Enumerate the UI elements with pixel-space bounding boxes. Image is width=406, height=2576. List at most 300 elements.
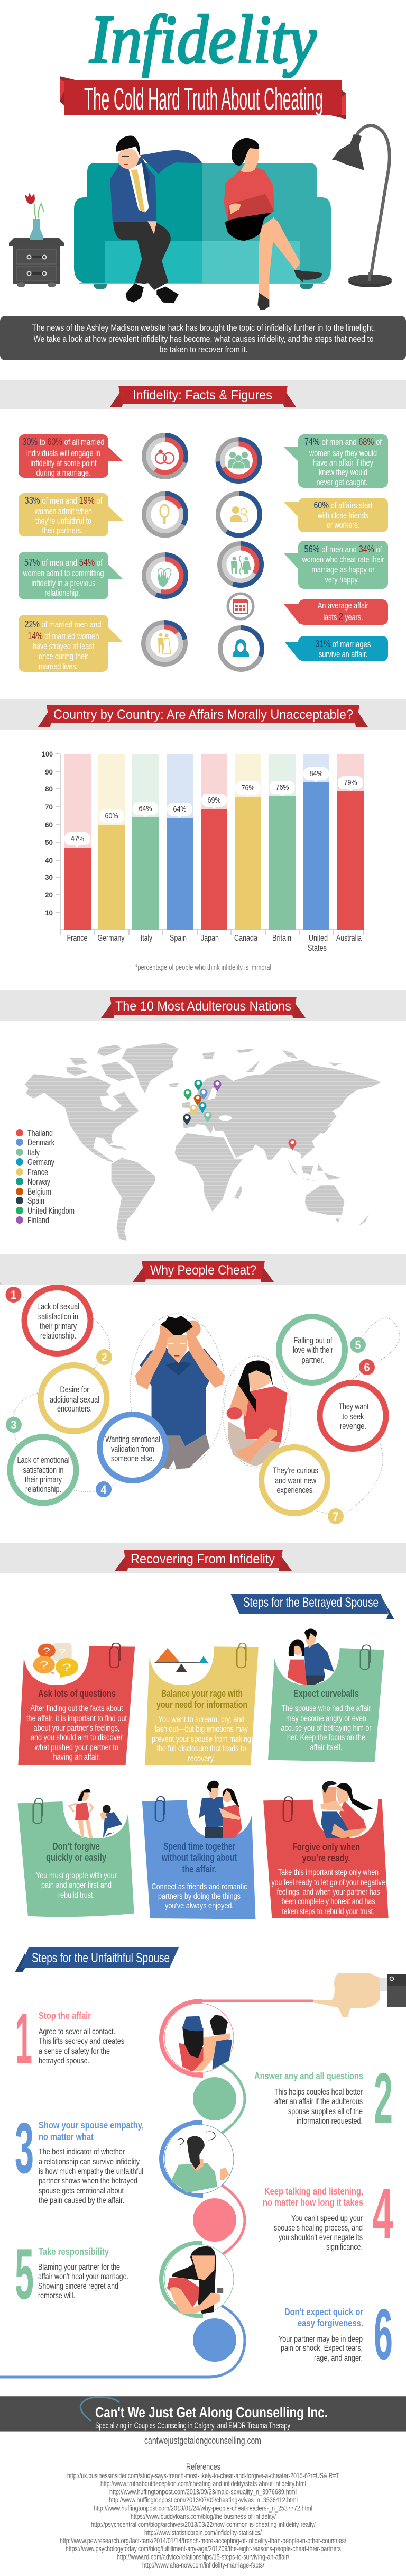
reason 2: additional sexual — [50, 1395, 99, 1405]
card: expect curveballs: her. Keep the focus on the — [287, 1733, 365, 1742]
map pin: United Kingdom — [184, 1089, 191, 1100]
sofa — [74, 163, 331, 289]
step 6: pain or shock. Expect tears, — [281, 2344, 363, 2353]
card: don't forgive quickly: rebuild trust. — [58, 1891, 95, 1900]
step 4: significance. — [326, 2243, 363, 2252]
card: spend time together: Spend time together — [163, 1841, 235, 1852]
card: balance your rage: recovery. — [188, 1754, 215, 1763]
step 4 — [263, 2173, 393, 2254]
callout: 74 and 68 percent: women say they would — [309, 449, 377, 458]
map pin: Finland — [214, 1080, 221, 1091]
chart axes: 30 — [45, 873, 53, 881]
icon: question bubbles — [33, 1643, 78, 1678]
map legend — [16, 1128, 75, 1225]
card: spend time together: without talking about — [161, 1852, 237, 1863]
step 5: Take responsibility — [39, 2246, 109, 2257]
card: spend time together — [142, 1781, 255, 1919]
reason 1: 1 — [11, 1288, 16, 1301]
photo circle: woman with phone — [164, 2244, 234, 2314]
reason 5 — [279, 1316, 366, 1383]
step 1: betrayed spouse. — [39, 2056, 89, 2065]
callout: 22 and 14 percent: married lives. — [39, 662, 78, 671]
footer band with logo — [0, 2396, 406, 2432]
map pin: Thailand — [289, 1139, 296, 1150]
step 3: no matter what — [39, 2131, 94, 2142]
step 2: information requested. — [297, 2117, 363, 2126]
icon: paperclip — [155, 1797, 164, 1821]
bar: Australia 79 percent — [336, 754, 364, 943]
bar: Canada 76 percent: Canada — [234, 934, 257, 943]
card: ask lots of questions: Ask lots of questions — [38, 1688, 116, 1699]
heading: facts and figures: Infidelity: Facts & Figures — [133, 388, 272, 403]
references: http://www.rd.com/advice/relationships/15-steps-to-surviving-an-affair/ — [117, 2553, 289, 2561]
callout: 57 and 54 percent: 57% of men and 54% of — [24, 557, 103, 568]
card: ask lots of questions: what pushed your partner to — [34, 1743, 118, 1752]
icon: paperclip — [361, 1645, 370, 1670]
card: don't forgive quickly: You must grapple with your — [36, 1871, 117, 1880]
card: balance your rage: your need for information — [156, 1699, 247, 1710]
callout: 57 and 54 percent: relationship. — [44, 588, 80, 598]
step 2: after an affair if the adulterous — [274, 2097, 363, 2106]
card: forgive only when ready: Forgive only when — [292, 1842, 360, 1852]
reason 6: revenge. — [340, 1422, 366, 1431]
chart axes: 50 — [45, 839, 53, 846]
callout: 56 and 34 percent: marriage as happy or — [312, 565, 375, 575]
reason 3: their primary — [25, 1475, 62, 1485]
chart axes: 60 — [45, 821, 53, 829]
card: forgive only when ready: taken steps to rebuild your trust. — [282, 1907, 374, 1916]
card: spend time together: you've always enjoyed. — [165, 1901, 234, 1910]
illustration: worried man — [135, 1316, 225, 1469]
callout: 74 and 68 percent: 74% of men and 68% of — [304, 436, 382, 447]
bar: Canada 76 percent: 76% — [241, 784, 255, 793]
reason 1: satisfaction in — [38, 1312, 78, 1322]
bar chart: moral unacceptability by country — [42, 750, 364, 953]
icon: paperclip — [33, 1798, 43, 1824]
bar: Italy 64 percent: 64% — [139, 804, 152, 813]
bar: Japan 69 percent: Japan — [201, 934, 219, 943]
bar: France 47 percent: 47% — [71, 834, 84, 843]
banner: steps for the unfaithful spouse: Steps for the Unfaithful Spouse — [32, 1951, 170, 1965]
step 5 — [15, 2234, 128, 2314]
references: http://www.huffingtonpost.com/2013/07/02/cheating-wives_n_3536412.html — [109, 2496, 298, 2504]
chart axes: 80 — [45, 785, 53, 793]
callout: 30 to 60 percent: during a marriage. — [36, 468, 91, 478]
icon: pointing hand — [313, 1973, 406, 2017]
chart axes: 90 — [45, 768, 53, 776]
map pin: Germany — [199, 1102, 206, 1113]
reason 1: Lack of sexual — [37, 1302, 79, 1312]
card: don't forgive quickly: pain and anger first and — [41, 1881, 112, 1890]
reason 1 — [5, 1287, 90, 1353]
reason 7: and want new — [275, 1476, 316, 1486]
reason 3 — [6, 1417, 76, 1503]
step 2: Answer any and all questions — [254, 2070, 363, 2081]
photo circle: woman from behind — [164, 2125, 234, 2193]
heading: recovering from infidelity — [0, 1543, 406, 1573]
step 3 — [15, 2108, 144, 2205]
reason 5: 5 — [355, 1339, 361, 1352]
banner: steps for the unfaithful spouse — [15, 1947, 179, 1972]
card: spend time together: partners by doing the things — [158, 1892, 241, 1901]
references: http://www.truthaboutdeception.com/cheating-and-infidelity/stats-about-infidelity.html — [100, 2480, 306, 2488]
card: balance your rage: prevent your spouse from making — [152, 1735, 251, 1744]
step 6: Don’t expect quick or — [284, 2306, 363, 2317]
photo circle: couple from behind — [164, 2003, 234, 2073]
callout: 33 and 19 percent — [19, 493, 123, 536]
heading: most adulterous nations — [0, 990, 406, 1021]
card: forgive only when ready: been completely honest and has — [281, 1897, 375, 1906]
world map — [25, 1043, 381, 1241]
reason 3: satisfaction in — [23, 1466, 63, 1475]
bar: Spain 64 percent — [167, 754, 193, 943]
bar: United States 84 percent: 84% — [310, 769, 322, 778]
bar: Germany 60 percent: 60% — [105, 812, 118, 821]
card: ask lots of questions: about your partner's feelings, — [34, 1724, 119, 1733]
map legend: United Kingdom — [27, 1206, 75, 1216]
bar: Italy 64 percent: Italy — [141, 934, 152, 943]
step 1: This lifts secrecy and creates — [39, 2037, 124, 2046]
step 1: a sense of safety for the — [39, 2047, 110, 2056]
step 4: you shouldn't ever negate its — [279, 2233, 363, 2242]
callout: 22 and 14 percent: 22% of married men and — [24, 619, 102, 630]
card: expect curveballs: accuse you of betraying him or — [281, 1724, 371, 1733]
step 3: Show your spouse empathy, — [39, 2119, 144, 2131]
card: forgive only when ready — [263, 1781, 389, 1918]
card: ask lots of questions: After finding out the facts about — [31, 1704, 123, 1713]
chart axes: 40 — [45, 857, 53, 864]
heading: recovering from infidelity: Recovering From Infidelity — [131, 1552, 275, 1567]
heading: why people cheat: Why People Cheat? — [150, 1263, 256, 1278]
callout: 33 and 19 percent: their partners. — [42, 526, 82, 535]
bar: Britain 76 percent: Britain — [272, 934, 291, 943]
chart footnote: *percentage of people who think infidelity is immoral — [135, 963, 271, 972]
step 3: spouse gets emotional about — [39, 2187, 124, 2196]
bar: Australia 79 percent: Australia — [336, 934, 362, 943]
references: http://psychcentral.com/blog/archives/2013/03/22/how-common-is-cheating-infidelity-really/ — [91, 2520, 316, 2528]
card: balance your rage — [145, 1643, 259, 1765]
step 6 — [279, 2294, 393, 2374]
callout: 60 percent: 60% of affairs start — [314, 500, 373, 511]
reason 1: their primary — [40, 1322, 77, 1331]
reason 3: Lack of emotional — [17, 1455, 70, 1465]
map pin: Spain — [183, 1114, 191, 1125]
icon: question bubbles: ? — [43, 1646, 50, 1656]
intro text box — [0, 316, 406, 360]
card: expect curveballs — [268, 1629, 384, 1762]
step 5: affair won't heal your marriage. — [38, 2272, 128, 2281]
logo arc — [80, 2397, 119, 2421]
step 2: This helps couples heal better — [274, 2088, 363, 2097]
step 3: partner shows when the betrayed — [39, 2177, 137, 2186]
map pin: Norway — [195, 1080, 202, 1091]
icon: paperclip — [237, 1643, 246, 1668]
card: balance your rage: the full disclosure that leads to — [156, 1744, 246, 1753]
reason 6: to seek — [343, 1412, 364, 1422]
chart axes: 20 — [45, 891, 53, 899]
reason 3: relationship. — [25, 1485, 61, 1494]
reason 7: 7 — [333, 1510, 338, 1523]
map legend: Germany — [27, 1158, 55, 1167]
step 3: The best indicator of whether — [39, 2147, 125, 2156]
callout: 33 and 19 percent: women admit when — [34, 507, 92, 516]
icon: question bubbles: ? — [62, 1661, 71, 1673]
callout: 74 and 68 percent: never get caught. — [316, 478, 368, 487]
bar: Japan 69 percent: 69% — [207, 796, 221, 805]
reason 4: validation from — [111, 1444, 154, 1454]
chart axes: 70 — [45, 803, 53, 811]
heading: country by country: Country by Country: Are Affairs Morally Unacceptable? — [53, 707, 353, 722]
step 3: is how much empathy the unfaithful — [39, 2167, 143, 2176]
callout: 56 and 34 percent: very happy. — [325, 575, 359, 585]
map legend: Denmark — [27, 1138, 55, 1148]
bar: Japan 69 percent — [201, 754, 227, 943]
callout: average affair: lasts 2 years. — [324, 612, 363, 623]
step 6: rage, and anger. — [314, 2354, 363, 2363]
donut: 74 and 68 percent with group icon — [218, 439, 260, 481]
map pin: Denmark — [200, 1089, 207, 1100]
card: spend time together: the affair. — [182, 1864, 217, 1874]
bar: Britain 76 percent: 76% — [276, 783, 289, 792]
map legend: Finland — [27, 1216, 49, 1225]
card: ask lots of questions: having an affair. — [53, 1753, 100, 1762]
chart axes: 10 — [45, 909, 53, 917]
bar: Canada 76 percent — [234, 754, 261, 943]
card: spend time together: Connect as friends and romantic — [151, 1882, 247, 1891]
icon: question bubbles: ? — [59, 1647, 66, 1657]
bar: Spain 64 percent: 64% — [173, 805, 186, 814]
step 4: You can't speed up your — [291, 2214, 363, 2223]
reason 4 — [96, 1415, 166, 1497]
floor lamp — [332, 125, 392, 287]
illustration: couple together — [199, 1781, 242, 1838]
card: don't forgive quickly: Don’t forgive — [52, 1841, 100, 1852]
callout: 60 percent: with close friends — [317, 511, 368, 521]
donut: 33 and 19 percent with mirror icon — [144, 494, 186, 535]
icon: paperclip — [283, 1797, 292, 1821]
bar: Australia 79 percent: 79% — [344, 778, 357, 787]
callout: average affair: An average affair — [318, 601, 368, 611]
bar: Germany 60 percent — [97, 754, 125, 943]
bar: France 47 percent: France — [67, 934, 88, 943]
step 2 — [254, 2058, 393, 2138]
step 5: remorse will. — [38, 2291, 75, 2300]
bar: France 47 percent — [64, 754, 91, 943]
callout: 56 and 34 percent: 56% of men and 34% of — [304, 544, 382, 554]
card: expect curveballs: The spouse who had the affair — [281, 1704, 371, 1713]
card: expect curveballs: Expect curveballs — [293, 1688, 359, 1699]
subtitle ribbon — [60, 76, 346, 119]
callout: 57 and 54 percent: infidelity in a previous — [32, 579, 95, 588]
card: ask lots of questions — [18, 1643, 135, 1765]
card: expect curveballs: affair itself. — [310, 1743, 343, 1752]
small ring: calendar icon — [228, 594, 253, 619]
illustration: arguing couple — [69, 1789, 122, 1838]
bar: United States 84 percent: United — [309, 934, 328, 943]
map legend: Thailand — [27, 1128, 53, 1138]
reason 1: relationship. — [40, 1331, 76, 1341]
chart axes: 100 — [42, 750, 53, 758]
card: balance your rage: You want to scream, cry, and — [159, 1715, 244, 1724]
icon: balance scale — [154, 1648, 208, 1672]
card: expect curveballs: may become angry or even — [286, 1714, 366, 1723]
callout: 33 and 19 percent: 33% of men and 19% of — [24, 495, 103, 506]
bar: United States 84 percent: States — [308, 944, 327, 953]
callout: 74 and 68 percent: have an affair if they — [313, 458, 374, 468]
callout: 30 to 60 percent: 30% to 60% of all married — [22, 436, 105, 447]
reason 2: 2 — [102, 1351, 107, 1364]
map pin: France — [189, 1105, 198, 1116]
step 2: spouse supplies all of the — [288, 2107, 363, 2116]
step 5: Showing sincere regret and — [38, 2282, 118, 2291]
disc: green — [193, 2077, 236, 2120]
callout: 57 and 54 percent — [19, 552, 123, 599]
bar: Spain 64 percent: Spain — [170, 934, 187, 943]
reason 6: 6 — [364, 1361, 370, 1374]
illustration: couple — [288, 1629, 334, 1685]
reason 3: 3 — [11, 1418, 17, 1432]
callout: 22 and 14 percent: have strayed at least — [33, 642, 94, 651]
disc: blue — [193, 2318, 236, 2362]
donut: 31 percent with woman icon — [220, 627, 262, 670]
heading: most adulterous nations: The 10 Most Adulterous Nations — [115, 999, 291, 1014]
bar: United States 84 percent — [303, 754, 329, 953]
footer band with logo: Specializing in Couples Counseling in Calgary, and EMDR Trauma Therapy — [95, 2421, 290, 2431]
heading: facts and figures — [0, 380, 406, 409]
step 6: easy forgiveness. — [298, 2317, 363, 2328]
references: http://www.huffingtonpost.com/2013/09/23/male-sexuality_n_3976689.html — [109, 2488, 297, 2496]
banner: steps for the betrayed spouse — [230, 1594, 394, 1619]
references: https://www.buddyloans.com/blog/the-business-of-infidelity/ — [131, 2513, 276, 2520]
map pin: Italy — [204, 1112, 211, 1123]
callout: 22 and 14 percent: once during their — [39, 652, 88, 661]
chart axes — [42, 750, 364, 935]
callout: average affair — [284, 599, 388, 625]
reason 7: experiences. — [277, 1486, 314, 1495]
callout: 56 and 34 percent — [284, 541, 388, 589]
map legend: Spain — [27, 1196, 44, 1206]
step 1: 1 — [15, 1998, 32, 2079]
donut: 60 percent with two people icon — [218, 494, 260, 535]
donut: 56 and 34 percent with split couple icon — [220, 544, 261, 585]
card: ask lots of questions: the affair, it is important to find out — [26, 1714, 127, 1723]
references — [60, 2462, 346, 2569]
callout: 31 percent: 31% of marriages — [315, 639, 371, 649]
callout: 31 percent — [284, 636, 388, 661]
callout: 30 to 60 percent: infidelity at some point — [31, 459, 97, 468]
donut: 22 and 14 percent with wedding couple icon — [144, 622, 185, 665]
bar: Britain 76 percent — [269, 754, 296, 943]
card: don't forgive quickly: quickly or easily — [46, 1852, 106, 1863]
reason 6 — [320, 1359, 386, 1449]
footer band with logo: Can't We Just Get Along Counselling Inc. — [95, 2404, 328, 2420]
map legend: France — [27, 1168, 48, 1177]
callout: 22 and 14 percent: 14% of married women — [27, 631, 99, 641]
heading: why people cheat — [0, 1254, 406, 1285]
illustration: worried woman — [227, 1360, 288, 1467]
map legend: Norway — [27, 1177, 51, 1187]
step 6: Your partner may be in deep — [279, 2335, 363, 2344]
references: References — [186, 2462, 220, 2472]
website: cantwejustgetalongcounselling.com — [144, 2435, 261, 2446]
step 1 — [15, 1998, 124, 2079]
reason 4: 4 — [100, 1483, 107, 1496]
step 5: 5 — [15, 2234, 34, 2314]
donut: 30 and 60 percent with rings icon — [144, 435, 186, 477]
step 4: no matter how long it takes — [263, 2197, 363, 2208]
card: ask lots of questions: and you should aim to discover — [31, 1733, 123, 1742]
step 5: Blaming your partner for the — [38, 2263, 120, 2272]
reason 2: encounters. — [57, 1404, 92, 1414]
reason 2 — [41, 1349, 112, 1432]
map pin: Belgium — [193, 1095, 202, 1106]
step 3: the pain caused by the affair. — [39, 2196, 124, 2205]
step 3: a relationship can survive infidelity — [39, 2158, 140, 2167]
callout: 74 and 68 percent: knew they would — [319, 468, 367, 477]
icon: question bubbles: ? — [40, 1659, 49, 1671]
card: forgive only when ready: Take this important step only when — [278, 1868, 379, 1877]
heading: country by country — [0, 699, 406, 730]
title: Infidelity — [89, 2, 317, 78]
step 4: spouse's healing process, and — [274, 2224, 363, 2233]
reason 5: love with their — [293, 1345, 333, 1355]
timeline connector — [0, 2001, 313, 2377]
card: don't forgive quickly — [17, 1789, 134, 1917]
bar: Italy 64 percent — [132, 754, 159, 943]
callout: 22 and 14 percent — [19, 615, 123, 672]
disc: pink — [193, 2198, 236, 2242]
card: balance your rage: lash out—but big emotions may — [155, 1725, 248, 1734]
step 4: Keep talking and listening, — [264, 2186, 363, 2197]
step 3: 3 — [15, 2108, 34, 2188]
callout: 57 and 54 percent: women admit to committing — [23, 569, 104, 578]
map legend: Italy — [27, 1148, 40, 1158]
step 1: Stop the affair — [39, 2010, 91, 2021]
references: http://www.aha-now.com/infidelity-marriage-facts/ — [142, 2561, 264, 2569]
reason 4: Wanting emotional — [105, 1435, 160, 1444]
step 1: Agree to sever all contact. — [39, 2027, 115, 2036]
reason 7: They're curious — [273, 1466, 318, 1476]
bar: Germany 60 percent: Germany — [97, 934, 125, 943]
map legend: Belgium — [27, 1187, 51, 1197]
callout: 33 and 19 percent: they're unfaithful to — [35, 516, 91, 526]
card: forgive only when ready: you’re ready. — [302, 1853, 350, 1863]
reason 2: Desire for — [60, 1385, 89, 1395]
woman — [224, 138, 322, 310]
donut: 57 and 54 percent with hand on heart icon — [144, 554, 186, 597]
reason 6: They want — [338, 1402, 369, 1412]
callout: 30 to 60 percent — [19, 434, 123, 478]
intro text box: be taken to recover from it. — [160, 344, 247, 354]
callout: 74 and 68 percent — [284, 434, 388, 488]
icon: paperclip — [110, 1643, 120, 1668]
reason 7 — [261, 1448, 344, 1524]
callout: 30 to 60 percent: individuals will engage in — [26, 449, 100, 458]
man — [110, 135, 202, 303]
reason 4: someone else. — [111, 1454, 154, 1463]
illustration: couple on sofa — [9, 125, 392, 310]
nightstand with tulip — [9, 193, 64, 287]
reason 5: partner. — [301, 1355, 325, 1365]
callout: 60 percent — [284, 498, 388, 532]
callout: 31 percent: survive an affair. — [319, 650, 367, 659]
card: forgive only when ready: feelings, and when your partner has — [277, 1888, 380, 1897]
references: http://www.statisticbrain.com/infidelity-statistics/ — [144, 2529, 262, 2536]
illustration: embracing couple — [320, 1781, 373, 1838]
callout: 60 percent: or workers. — [327, 521, 359, 530]
reason 5: Falling out of — [294, 1336, 333, 1345]
card: balance your rage: Balance your rage with — [161, 1688, 243, 1699]
